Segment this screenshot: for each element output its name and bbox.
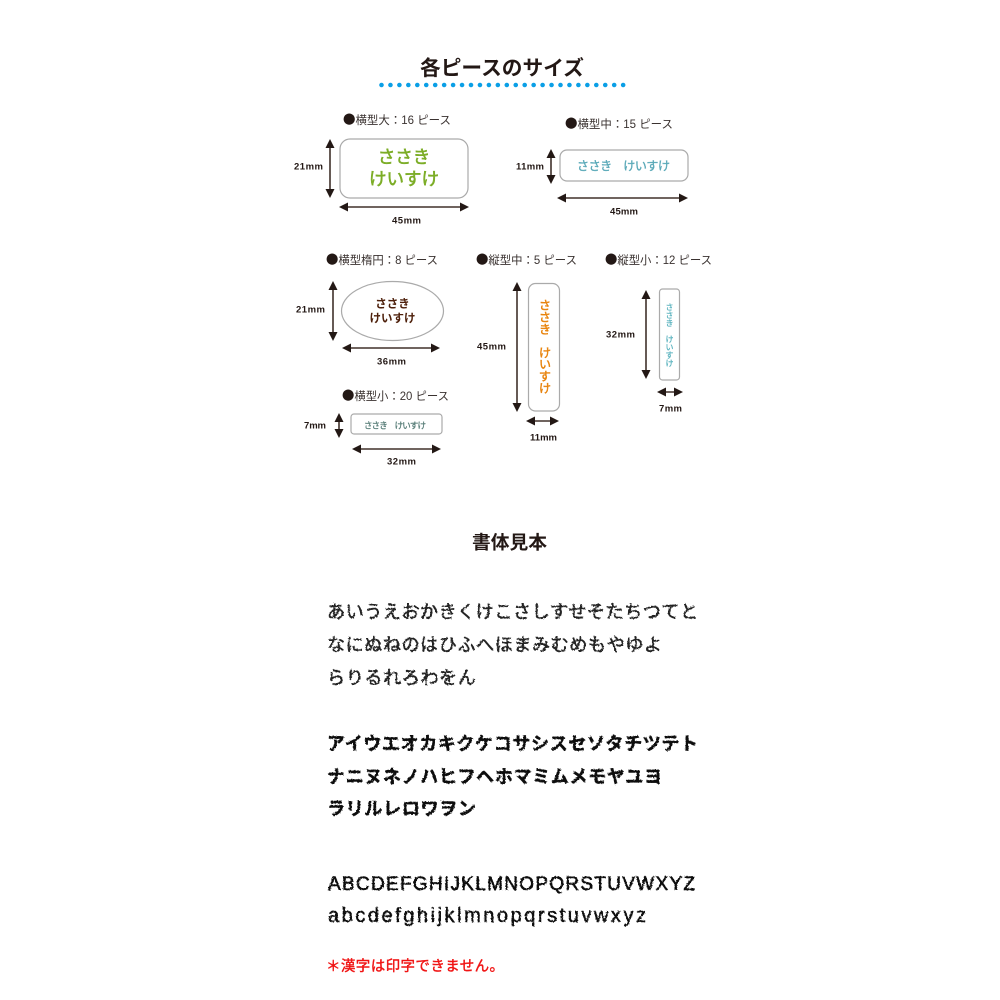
sticker: medium horizontal [560, 150, 688, 181]
dimension: 45mm: 45mm [610, 206, 638, 218]
arrow: height 21mm [326, 139, 334, 198]
note: kanji cannot be printed: ＊漢字は印字できません。 [326, 958, 504, 975]
sticker: oval [342, 282, 444, 340]
panel: large horizontal 45x21mm [294, 109, 469, 226]
arrow: height 32mm [642, 290, 650, 379]
text block: hiragana sample: あいうえおかきくけこさしすせそたちつてと [327, 602, 698, 622]
sticker: large horizontal: けいすけ [369, 169, 439, 189]
arrow: width 45mm [339, 202, 469, 212]
heading: typeface sample: 書体見本 [472, 532, 547, 553]
text block: katakana sample [327, 734, 698, 819]
text block: alphabet sample: abcdefghijklmnopqrstuvwxyz [328, 905, 646, 927]
arrow: height 7mm [334, 413, 344, 438]
arrow: height 45mm [512, 282, 522, 412]
text block: katakana sample: アイウエオカキクケコサシスセソタチツテト [327, 734, 698, 754]
arrow: width 11mm [526, 416, 559, 426]
arrow: width 45mm [557, 194, 688, 202]
dimension: 45mm: 45mm [392, 216, 421, 226]
text block: hiragana sample: なにぬねのはひふへほまみむめもやゆよ [327, 635, 662, 655]
sticker: oval: けいすけ [370, 312, 416, 325]
label: large horizontal count: ●横型大：16 ピース [343, 109, 451, 128]
arrow: height 21mm [328, 281, 338, 341]
text block: katakana sample: ナニヌネノハヒフヘホマミムメモヤユヨ [327, 767, 662, 787]
sticker: medium horizontal: ささき けいすけ [577, 159, 670, 173]
dimension: 21mm: 21mm [294, 162, 323, 172]
sticker: medium vertical: ささき けいすけ [537, 299, 551, 393]
panel: oval 36x21mm [296, 249, 444, 368]
sticker: oval: ささき [375, 298, 410, 310]
arrow: width 32mm [352, 444, 441, 454]
text block: hiragana sample: らりるれろわをん [327, 668, 476, 688]
panel: medium vertical 11x45mm [476, 249, 577, 444]
dimension: 32mm: 32mm [387, 456, 416, 468]
text block: hiragana sample [327, 602, 698, 688]
dimension: 32mm: 32mm [606, 330, 635, 340]
dimension: 11mm: 11mm [516, 162, 544, 172]
text block: katakana sample: ラリルレロワヲン [327, 799, 476, 819]
label: small vertical count: ●縦型小：12 ピース [605, 249, 712, 268]
text block: alphabet sample: ABCDEFGHIJKLMNOPQRSTUVWXYZ [328, 874, 695, 895]
dimension: 36mm: 36mm [377, 356, 406, 368]
label: small horizontal count: ●横型小：20 ピース [342, 385, 449, 404]
label: oval count: ●横型楕円：8 ピース [326, 249, 438, 268]
arrow: width 7mm [657, 388, 683, 396]
dimension: 7mm: 7mm [659, 404, 682, 414]
dimension: 45mm: 45mm [477, 342, 506, 352]
label: medium horizontal count: ●横型中：15 ピース [565, 113, 673, 132]
sticker: small vertical: ささき けいすけ [665, 303, 674, 367]
sticker: small horizontal: ささき けいすけ [364, 420, 426, 430]
title: size of each piece: 各ピースのサイズ [420, 56, 584, 80]
sticker: large horizontal [340, 139, 468, 198]
sticker: small vertical [660, 289, 680, 380]
panel: small horizontal 32x7mm [304, 385, 449, 468]
sticker: small horizontal [351, 414, 442, 434]
label: medium vertical count: ●縦型中：5 ピース [476, 249, 577, 268]
dotted underline [382, 83, 624, 87]
arrow: height 11mm [546, 149, 556, 184]
text block: alphabet sample [328, 874, 695, 927]
dimension: 11mm: 11mm [530, 432, 557, 444]
dimension: 7mm: 7mm [304, 420, 326, 432]
dimension: 21mm: 21mm [296, 304, 325, 316]
panel: medium horizontal 45x11mm [516, 113, 688, 218]
sticker: large horizontal: ささき [378, 147, 430, 167]
panel: small vertical 7x32mm [605, 249, 712, 414]
arrow: width 36mm [342, 344, 440, 352]
sticker: medium vertical [528, 284, 560, 411]
